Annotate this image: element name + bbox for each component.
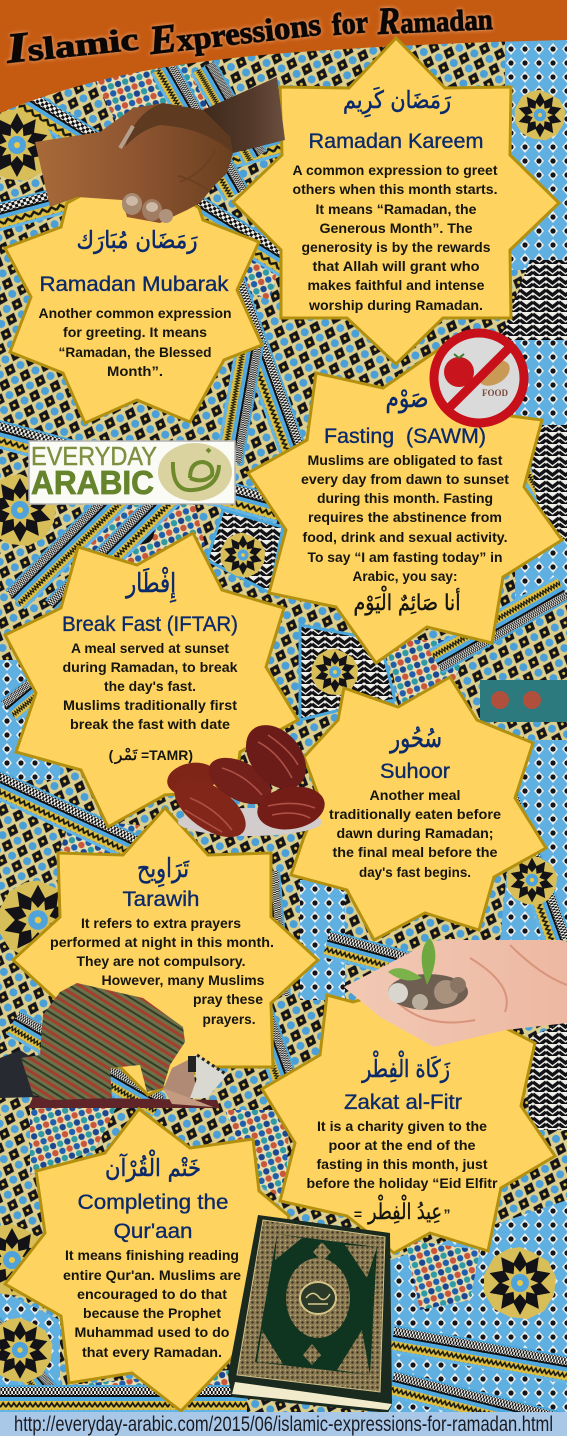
title	[3, 0, 494, 73]
image: man praying	[0, 983, 227, 1108]
description: Completing the Qur'aan: It means finishing reading	[65, 1247, 239, 1263]
description: Completing the Qur'aan: that every Ramadan.	[82, 1344, 222, 1360]
heading: Ramadan Kareem: Ramadan Kareem	[308, 130, 484, 153]
description: Zakat al-Fitr: It is a charity given to the	[317, 1118, 487, 1134]
description: Iftar: during Ramadan, to break	[62, 659, 238, 675]
description: Suhoor: traditionally eaten before	[329, 806, 501, 822]
heading: Suhoor: Suhoor	[380, 760, 450, 783]
arabic: I am fasting today: أنا صَائِمٌ الْيَوْم	[354, 584, 460, 616]
description: Fasting: during this month. Fasting	[317, 490, 493, 506]
icon: no food sign: FOOD	[482, 388, 508, 398]
description: Tarawih: prayers.	[202, 1011, 256, 1027]
panel: Ramadan Kareem	[233, 38, 559, 364]
description: Fasting: Arabic, you say:	[352, 568, 458, 584]
heading: Completing the Qur'aan: Completing the	[78, 1191, 228, 1214]
description: Iftar: the day's fast.	[104, 678, 196, 694]
description: Zakat al-Fitr: fasting in this month, just	[316, 1156, 488, 1172]
tamr label: =TAMR)	[141, 747, 193, 763]
title: Expressions	[146, 0, 323, 63]
description: Ramadan Mubarak: “Ramadan, the Blessed	[58, 344, 212, 360]
arabic: Ramadan Mubarak: رَمَضَان مُبَارَك	[76, 226, 198, 254]
description: Ramadan Kareem: generosity is by the rewards	[302, 239, 491, 255]
heading: Fasting (SAWM): Fasting (SAWM)	[324, 425, 486, 448]
description: Zakat al-Fitr	[306, 1118, 498, 1191]
arabic: Suhoor: سُحُور	[388, 724, 442, 754]
arabic: Zakat al-Fitr: زَكَاة الْفِطْر	[361, 1050, 450, 1083]
heading: Completing the Qur'aan: Qur'aan	[114, 1220, 192, 1243]
icon: handshake	[35, 77, 285, 223]
panel: Zakat al-Fitr	[262, 985, 555, 1253]
description: Iftar: break the fast with date	[70, 716, 230, 732]
tamr label	[109, 745, 193, 765]
logo: Everyday Arabic: EVERYDAY	[31, 441, 157, 471]
framed chevron diamonds	[207, 260, 567, 1130]
description: Fasting: requires the abstinence from	[308, 509, 502, 525]
arabic: Eid Elfitr: عِيدُ الْفِطْر	[367, 1193, 442, 1225]
image: Quran	[228, 1215, 392, 1413]
logo: Everyday Arabic: ARABIC	[31, 464, 154, 501]
description: Completing the Qur'aan: encouraged to do that	[77, 1286, 227, 1302]
large dotted medallion areas	[90, 55, 210, 130]
description: Ramadan Kareem	[292, 162, 498, 313]
description: Fasting: food, drink and sexual activity.	[302, 529, 508, 545]
description: Suhoor	[329, 787, 501, 880]
panel: Suhoor	[291, 677, 546, 940]
description: Suhoor: day's fast begins.	[359, 864, 471, 880]
heading: Tarawih: Tarawih	[122, 888, 200, 911]
heading: Ramadan Mubarak: Ramadan Mubarak	[40, 273, 229, 296]
icon: no food sign	[434, 333, 524, 423]
description: Tarawih	[50, 915, 274, 1027]
description: Ramadan Mubarak	[38, 305, 232, 379]
panel: Completing the Qur'aan	[5, 1109, 289, 1411]
title: for	[331, 4, 370, 42]
description: Fasting: every day from dawn to sunset	[301, 471, 509, 487]
diagonal tile bands	[15, 88, 386, 334]
rosettes	[0, 109, 53, 181]
description: Tarawih: pray these	[193, 991, 263, 1007]
panel: Break Fast (IFTAR)	[5, 533, 298, 827]
panel: Tarawih	[13, 808, 318, 1095]
description: Fasting: Muslims are obligated to fast	[308, 452, 503, 468]
description: Iftar: Muslims traditionally first	[63, 697, 237, 713]
description: Completing the Qur'aan: entire Qur'an. Muslims are	[63, 1267, 241, 1283]
panel: Ramadan Mubarak	[5, 165, 262, 423]
arabic: Sawm: صَوْم	[386, 384, 428, 414]
logo: Everyday Arabic	[29, 441, 235, 504]
description: Ramadan Kareem: A common expression to greet	[292, 162, 498, 178]
blue and white side areas	[505, 40, 567, 130]
description: Ramadan Mubarak: for greeting. It means	[63, 324, 207, 340]
description: Tarawih: However, many Muslims	[102, 972, 265, 988]
description: Ramadan Kareem: Generous Month”. The	[320, 220, 473, 236]
arabic: Eid Elfitr: ”	[444, 1206, 450, 1222]
description: Zakat al-Fitr: before the holiday “Eid Elfitr	[306, 1175, 498, 1191]
tamr label: (	[109, 747, 114, 763]
description: Fasting: To say “I am fasting today” in	[308, 549, 502, 565]
title: Ramadan	[376, 0, 494, 43]
description: Tarawih: They are not compulsory.	[76, 953, 246, 969]
description: Zakat al-Fitr: poor at the end of the	[328, 1137, 476, 1153]
description: Ramadan Mubarak: Another common expression	[38, 305, 232, 321]
panel: Fasting (SAWM)	[248, 345, 562, 663]
description: Ramadan Kareem: that Allah will grant who	[312, 258, 480, 274]
tamr label: تَمْر	[114, 745, 138, 765]
description: Completing the Qur'aan	[63, 1247, 241, 1360]
arabic: Eid Elfitr: =	[354, 1206, 362, 1222]
description: Iftar	[62, 640, 238, 732]
arabic: Khatm al-Quran: خَتْم الْقُرْآن	[105, 1149, 201, 1182]
description: Suhoor: the final meal before the	[332, 844, 498, 860]
description: Suhoor: Another meal	[370, 787, 460, 803]
arabic: Eid Elfitr	[354, 1193, 450, 1225]
description: Suhoor: dawn during Ramadan;	[336, 825, 494, 841]
description: Ramadan Kareem: others when this month starts.	[292, 181, 498, 197]
heading: Completing the Qur'aan	[78, 1191, 228, 1243]
description: Fasting	[301, 452, 509, 584]
heading: Zakat al-Fitr: Zakat al-Fitr	[344, 1091, 462, 1114]
arabic: Ramadan Kareem: رَمَضَان كَرِيم	[343, 86, 452, 118]
description: Iftar: A meal served at sunset	[71, 640, 229, 656]
image: hands holding coins	[344, 938, 567, 1047]
description: Tarawih: performed at night in this month.	[50, 934, 274, 950]
description: Completing the Qur'aan: Muhammad used to do	[74, 1324, 230, 1340]
description: Completing the Qur'aan: because the Prophet	[83, 1305, 221, 1321]
image: dates	[164, 713, 328, 849]
heading: Break Fast (IFTAR): Break Fast (IFTAR)	[62, 613, 238, 636]
title: Islamic	[3, 13, 140, 73]
description: Ramadan Mubarak: Month”.	[107, 363, 163, 379]
description: Tarawih: It refers to extra prayers	[81, 915, 241, 931]
title banner	[0, 0, 567, 113]
description: Ramadan Kareem: makes faithful and intense	[308, 277, 485, 293]
arabic: Iftar: إِفْطَار	[124, 567, 177, 603]
description: Ramadan Kareem: It means “Ramadan, the	[316, 201, 477, 217]
description: Ramadan Kareem: worship during Ramadan.	[308, 297, 483, 313]
arabic: Tarawih: تَرَاوِيح	[137, 854, 190, 887]
